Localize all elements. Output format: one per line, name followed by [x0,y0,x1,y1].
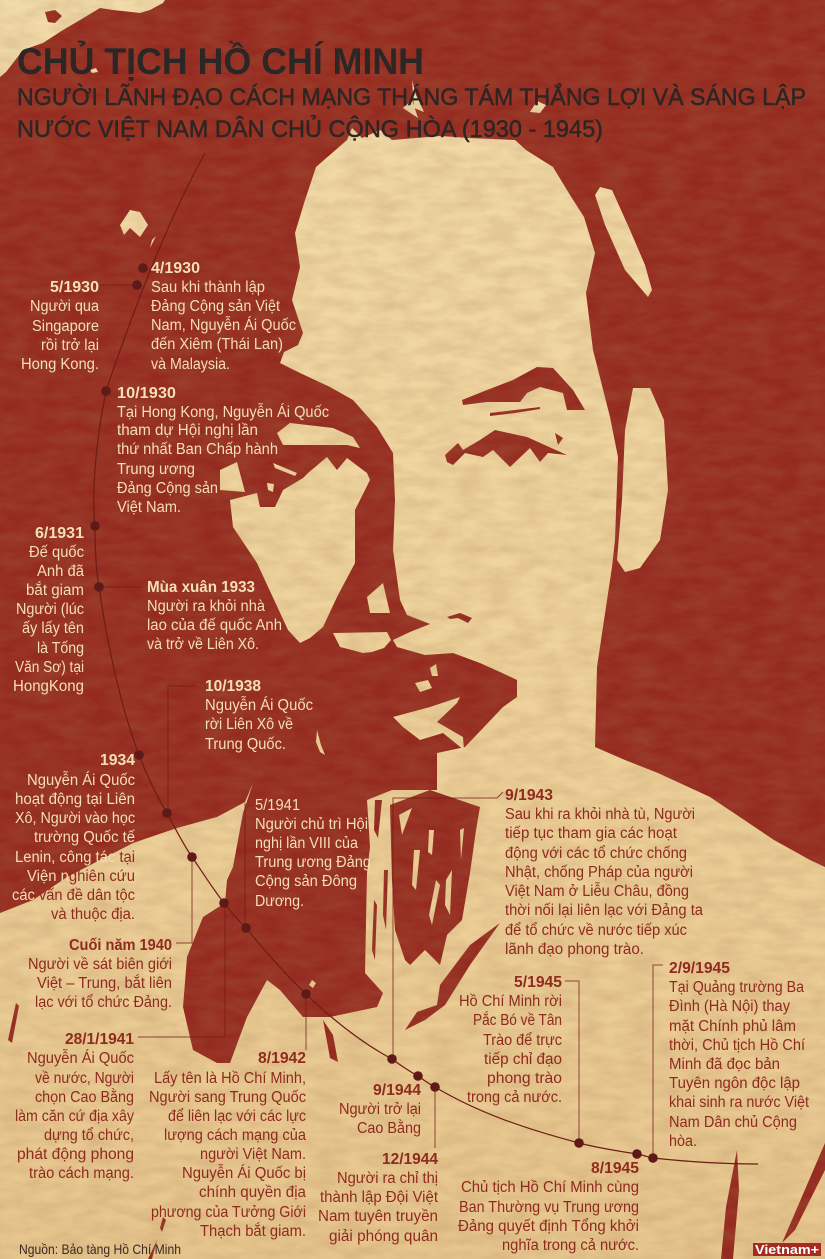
event: 5/1930: Hong Kong. [21,356,99,373]
event: 5/1941 [255,797,371,910]
portrait: ear [617,388,668,572]
event: 8/1945: Ban Thường vụ Trung ương [459,1199,639,1216]
event: 6/1931 [13,525,84,695]
event: 6/1931: Anh đã [37,563,84,580]
event: 10/1930: thứ nhất Ban Chấp hành [117,441,278,458]
event: 9/1943: Nhật, chống Pháp của người [505,864,693,881]
event: 9/1944: 9/1944 [373,1082,421,1099]
event: 2/9/1945: khai sinh ra nước Việt [669,1094,810,1111]
event: 9/1943: động với các tổ chức chống [505,845,687,862]
event: 4/1930: đến Xiêm (Thái Lan) [151,336,283,353]
event: Cuối năm 1940: Cuối năm 1940 [69,937,172,954]
subtitle line 2: NƯỚC VIỆT NAM DÂN CHỦ CỘNG HÒA (1930 - 1945) [17,114,603,143]
event: 5/1945: Trào để trực [483,1032,562,1049]
event: 8/1945: Đảng quyết định Tổng khởi [458,1218,639,1235]
event: 5/1941: Người chủ trì Hội [255,816,368,833]
event: 5/1930 [21,279,99,373]
event: 5/1945: tiếp chỉ đạo [484,1051,562,1068]
logo: Vietnam+: Vietnam+ [755,1242,819,1257]
timeline dots [90,263,658,1163]
event: 2/9/1945: 2/9/1945 [669,960,730,977]
portrait: hair flecks [90,68,546,988]
event: 2/9/1945: thời, Chủ tịch Hồ Chí [669,1037,806,1054]
event: 5/1941: Dương. [255,893,304,910]
event: 9/1943: Việt Nam ở Liễu Châu, đồng [505,883,689,900]
event: 10/1930: Tại Hong Kong, Nguyễn Ái Quốc [117,404,329,421]
portrait: red blotch in corner [45,10,62,23]
event: 2/9/1945: Tại Quảng trường Ba [669,979,804,996]
event: 4/1930 [151,260,296,373]
subtitle line 1: NGƯỜI LÃNH ĐẠO CÁCH MẠNG THÁNG TÁM THẮNG LỢI VÀ SÁNG LẬP [17,83,806,111]
event: 6/1931: 6/1931 [35,525,84,542]
portrait: right eye [445,430,567,467]
portrait: brow fleck [490,407,540,416]
event: 10/1930: Việt Nam. [117,499,181,516]
portrait: strip below nose [333,632,391,653]
event: 8/1942: để liên lạc với các lực [168,1108,306,1125]
portrait: lip highlight [393,697,464,750]
event: 8/1942: Thạch bắt giam. [200,1223,306,1240]
portrait: beard tan streaks [399,808,464,925]
event: Cuối năm 1940 [28,937,172,1011]
event: 9/1944: Người trở lại [339,1101,421,1118]
event: 8/1942: 8/1942 [258,1050,306,1067]
event: 8/1945 [458,1160,639,1254]
event: 12/1944: giải phóng quân [329,1228,438,1245]
event: 5/1945 [459,974,562,1106]
event: 5/1945: phong trào [487,1070,562,1087]
timeline connectors [99,285,663,1158]
event: 4/1930: Nam, Nguyễn Ái Quốc [151,317,296,334]
event: 10/1938: Nguyễn Ái Quốc [205,697,313,714]
title block [17,40,806,143]
portrait: diagonal beard stroke [405,923,500,1030]
event: 4/1930: Sau khi thành lập [151,279,265,296]
portrait: stray brush strokes [8,1003,825,1259]
portrait: right eyebrow [462,367,585,410]
event: Cuối năm 1940: Việt – Trung, bắt liên [37,975,172,992]
event: 5/1945: Hồ Chí Minh rời [459,993,562,1010]
event: 6/1931: bắt giam [26,582,84,599]
event: 9/1943: Sau khi ra khỏi nhà tù, Người [505,806,695,823]
event: 2/9/1945: hòa. [669,1133,697,1150]
event: 5/1941: Cộng sản Đông [255,873,357,890]
portrait: left cheek [230,457,370,643]
event: 5/1930: Người qua [30,298,99,315]
event: 12/1944: Nam tuyên truyền [318,1208,438,1225]
event: 1934: các vấn đề dân tộc [12,887,135,904]
event: 8/1942: Người sang Trung Quốc [149,1089,306,1106]
event: 5/1930: rồi trở lại [41,337,99,354]
event: 4/1930: và Malaysia. [151,356,230,373]
event: 6/1931: HongKong [13,678,84,695]
event: 10/1938: 10/1938 [205,678,261,695]
event: 6/1931: Đế quốc [29,544,84,561]
event: 28/1/1941: dựng tổ chức, [44,1127,134,1144]
event: Cuối năm 1940: lạc với tổ chức Đảng. [35,994,172,1011]
event: Mùa xuân 1933: Người ra khỏi nhà [147,598,265,615]
portrait: nostril [447,613,472,623]
event: 1934: Viện nghiên cứu [27,868,135,885]
event: 8/1945: nghĩa trong cả nước. [502,1237,639,1254]
event: 2/9/1945: Minh đã đọc bản [669,1056,780,1073]
event: 5/1941: 5/1941 [255,797,300,814]
event: Mùa xuân 1933: Mùa xuân 1933 [147,579,255,596]
event: Cuối năm 1940: Người về sát biên giới [28,956,172,973]
event: 1934: và thuộc địa. [51,906,135,923]
event: 12/1944: Người ra chỉ thị [337,1170,438,1187]
event: Mùa xuân 1933: và trở về Liên Xô. [147,636,259,653]
event: 5/1945: trong cả nước. [467,1089,562,1106]
event: 2/9/1945: Tuyên ngôn độc lập [669,1075,800,1092]
timeline curve [94,153,758,1164]
event: 1934: Lenin, công tác tại [15,849,135,866]
portrait: red flecks on tan strip [372,745,402,960]
event: 1934: hoạt động tại Liên [15,791,135,808]
event: 28/1/1941 [15,1031,134,1182]
event: 10/1938: rời Liên Xô về [205,716,293,733]
event: 12/1944: 12/1944 [382,1151,438,1168]
event: 5/1945: 5/1945 [514,974,562,991]
event: 10/1938: Trung Quốc. [205,736,286,753]
event: 2/9/1945 [669,960,810,1150]
event: 1934: Nguyễn Ái Quốc [27,772,135,789]
event: 5/1941: Trung ương Đảng [255,854,371,871]
event: 4/1930: 4/1930 [151,260,200,277]
event: 8/1942 [149,1050,306,1240]
event: 10/1938 [205,678,313,753]
event: Mùa xuân 1933: lao của đế quốc Anh [147,617,282,634]
event: 5/1945: Pắc Bó về Tân [473,1012,562,1029]
event: 8/1942: Lấy tên là Hồ Chí Minh, [154,1070,306,1087]
event: 9/1943: để tổ chức về nước tiếp xúc [505,922,687,939]
event: 5/1930: Singapore [32,318,99,335]
portrait: left brow ridge [277,423,360,448]
event: 6/1931: Người (lúc [16,601,84,618]
event: 9/1943: thời nối lại liên lạc với Đảng ta [505,902,703,919]
event: 28/1/1941: trào cách mạng. [29,1165,134,1182]
portrait: beard streak mass [390,790,480,965]
event: 8/1942: phương của Tưởng Giới [151,1204,306,1221]
event: 9/1943: tiếp tục tham gia các hoạt [505,825,678,842]
event: 8/1945: 8/1945 [591,1160,639,1177]
event: 4/1930: Đảng Cộng sản Việt [151,298,281,315]
event: 1934: 1934 [100,752,135,769]
event: 5/1930: 5/1930 [50,279,99,296]
event: 28/1/1941: Nguyễn Ái Quốc [27,1050,134,1067]
event: 8/1942: người Việt Nam. [200,1146,306,1163]
portrait: mark by right eye [555,433,563,445]
event: 28/1/1941: chọn Cao Bằng [35,1089,134,1106]
event: 10/1930: tham dự Hội nghị lần [117,422,258,439]
event: 9/1943: 9/1943 [505,787,553,804]
event: 8/1945: Chủ tịch Hồ Chí Minh cùng [461,1179,639,1196]
event: 12/1944 [318,1151,439,1245]
event: 28/1/1941: làm căn cứ địa xây [15,1108,134,1125]
event: 9/1943 [505,787,703,958]
portrait: flecks by left eye [220,462,297,492]
event: 2/9/1945: Nam Dân chủ Cộng [669,1114,797,1131]
event: 28/1/1941: phát động phong [17,1146,134,1163]
event: 9/1944 [339,1082,421,1137]
event: 28/1/1941: về nước, Người [35,1070,134,1087]
portrait: nose highlight [367,583,390,613]
event: 9/1943: lãnh đạo phong trào. [505,941,644,958]
event: 5/1941: nghị lần VIII của [255,835,358,852]
portrait: top-left paper corner [0,0,165,77]
event: 10/1930: Đảng Cộng sản [117,480,218,497]
source note: Nguồn: Bảo tàng Hồ Chí Minh [19,1241,181,1257]
event: 1934 [12,752,135,923]
event: 10/1930 [117,385,329,516]
event: 12/1944: thành lập Đội Việt [320,1189,439,1206]
event: 10/1930: Trung ương [117,461,195,478]
event: 8/1942: lượng cách mạng của [164,1127,306,1144]
portrait: hair tuft [595,187,652,297]
event: 28/1/1941: 28/1/1941 [65,1031,134,1048]
event: 2/9/1945: mặt Chính phủ lâm [669,1018,796,1035]
event: 10/1930: 10/1930 [117,385,176,402]
event: 8/1942: Nguyễn Ái Quốc bị [182,1165,306,1182]
event: 1934: trường Quốc tế [34,829,135,846]
event: 6/1931: ấy lấy tên [22,620,84,637]
event: 2/9/1945: Đình (Hà Nội) thay [669,998,790,1015]
portrait: moustache flecks [316,664,438,755]
event: 6/1931: Văn Sơ) tại [15,659,84,676]
event: 9/1944: Cao Bằng [357,1120,421,1137]
event: 8/1942: chính quyền địa [199,1184,306,1201]
event: 6/1931: là Tống [37,640,84,657]
main title: CHỦ TỊCH HỒ CHÍ MINH [17,40,424,82]
event: 1934: Xô, Người vào học [15,810,135,827]
event: Mùa xuân 1933 [147,579,282,653]
